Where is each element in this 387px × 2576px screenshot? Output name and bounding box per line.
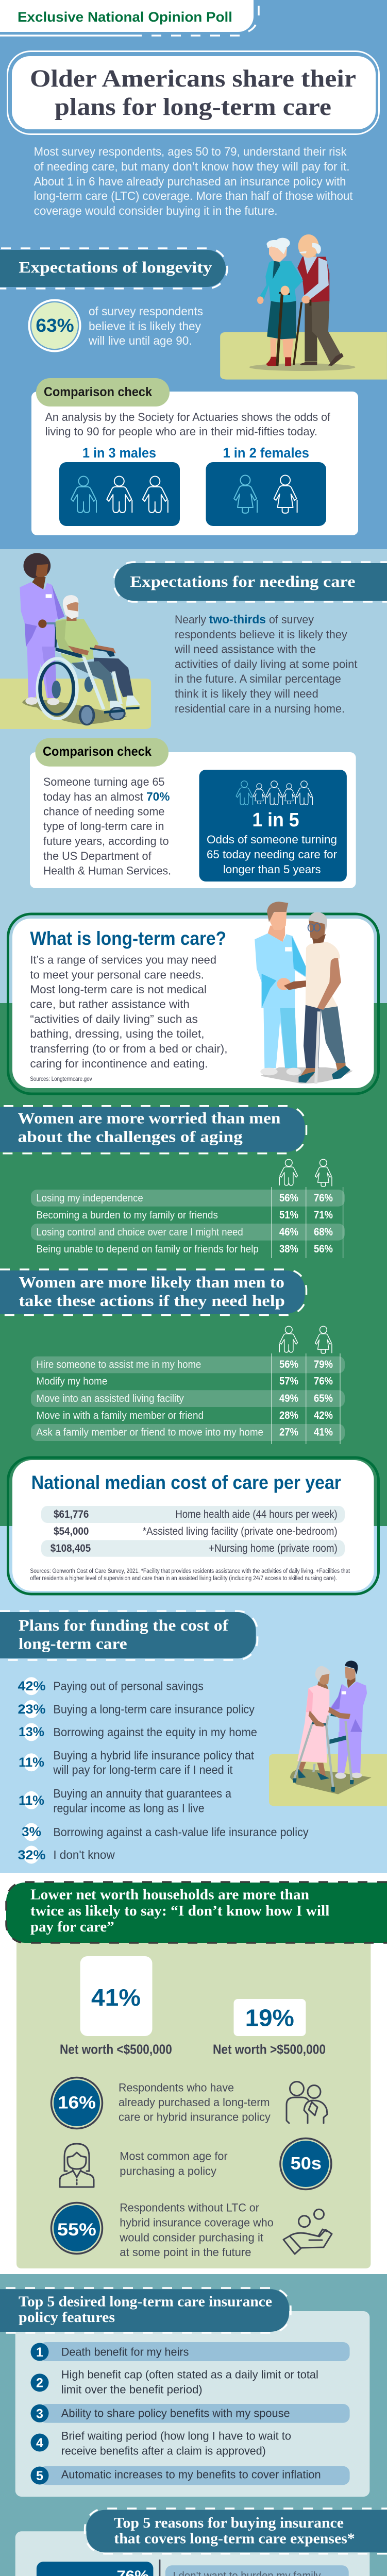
panel: comparison check longevity: living to 90 for people who are in their mid-fifties today. (45, 425, 317, 438)
text block: needing care: residential care in a nursing home. (175, 702, 345, 715)
panel: national median cost of care: $108,405 (51, 1543, 91, 1554)
table: worries by gender: Losing my independence (36, 1193, 143, 1204)
intro text: of needing care, but many don’t know how they will pay for it. (34, 160, 350, 173)
panel: comparison check needing care: Someone turning age 65 (43, 775, 164, 788)
panel: what is long-term care: care, but rather assistance with (30, 998, 190, 1011)
panel: net worth section (6, 1882, 387, 2268)
panel: national median cost of care: +Nursing home (private room) (209, 1543, 338, 1554)
table: actions by gender: 42% (314, 1410, 333, 1421)
panel: comparison check needing care: longer than 5 years (223, 863, 321, 876)
list: funding plans: Buying an annuity that guarantees a (53, 1787, 231, 1800)
panel: comparison check longevity: An analysis by the Society for Actuaries shows the odds of (45, 411, 331, 423)
panel: national median cost of care: $61,776 (54, 1509, 89, 1520)
panel: what is long-term care: bathing, dressing, using the toilet, (30, 1027, 205, 1040)
heading pill: lower net worth: Lower net worth households are more than (30, 1887, 309, 1903)
stat: 63 percent: of survey respondents (89, 304, 203, 318)
stat: 55 percent: would consider purchasing it (119, 2231, 264, 2244)
illustration: nurse helping woman with walker (269, 1660, 387, 1806)
list: funding plans (18, 1677, 309, 1864)
text block: needing care: Nearly (175, 613, 207, 626)
stat: 16 percent: already purchased a long-term (119, 2096, 270, 2109)
panel: top 5 desired features: Automatic increases to my benefits to cover inflation (61, 2468, 321, 2481)
panel: what is long-term care: What is long-term care? (30, 928, 226, 949)
panel: top 5 desired features: 3 (36, 2406, 43, 2421)
table: actions by gender: 76% (314, 1376, 333, 1387)
panel: what is long-term care (8, 902, 378, 1094)
top tab: exclusive poll (0, 0, 259, 36)
text block: needing care: activities of daily living at some point (175, 658, 358, 671)
panel: comparison check needing care: future years, according to (43, 835, 169, 848)
stat: 50s (280, 2138, 331, 2190)
heading pill: women more likely: Women are more likely than men to (19, 1273, 284, 1291)
panel: net worth section: purchasing a policy (120, 2165, 217, 2178)
stat: 63 percent: 63% (36, 315, 74, 336)
panel: what is long-term care: “activities of daily living” such as (30, 1013, 198, 1026)
panel: top 5 desired features: High benefit cap (often stated as a daily limit or total (61, 2368, 318, 2381)
list: funding plans: 11% (19, 1793, 44, 1808)
panel: top 5 desired features: Brief waiting period (how long I have to wait to (61, 2430, 291, 2443)
table: worries by gender: Losing control and choice over care I might need (36, 1227, 243, 1238)
table: actions by gender: 49% (279, 1393, 298, 1404)
section background: pale blue (0, 549, 387, 1003)
heading pill: top 5 desired features: Top 5 desired long-term care insurance (19, 2294, 272, 2310)
section background: blue (0, 0, 387, 549)
panel: national median cost of care: *Assisted living facility (private one-bedroom) (143, 1526, 338, 1537)
intro text (34, 145, 353, 217)
table: worries by gender: 56% (314, 1243, 333, 1255)
text block: needing care: will need assistance with the (174, 643, 316, 656)
icon: woman (60, 2144, 94, 2187)
list: funding plans: will pay for long-term care if I need it (53, 1763, 233, 1776)
panel: comparison check longevity (31, 378, 358, 535)
panel: top 5 reasons for buying (15, 2509, 387, 2576)
list: funding plans: 3% (22, 1825, 41, 1839)
panel: what is long-term care: Most long-term care is not medical (30, 983, 207, 996)
heading pill: women more worried (0, 1106, 306, 1154)
list: funding plans: 23% (18, 1702, 45, 1717)
intro text: coverage would consider buying it in the future. (34, 204, 278, 217)
panel: national median cost of care: Sources: Genworth Cost of Care Survey, 2021. *Facility that provides residents assistance with the activities of daily living. +Facilities that (30, 1568, 350, 1574)
panel: national median cost of care: $54,000 (54, 1526, 89, 1537)
table: actions by gender: 79% (314, 1359, 333, 1370)
panel: comparison check needing care: 70% (146, 790, 170, 803)
heading pill: plans for funding: long-term care (19, 1635, 127, 1653)
stat: 16 percent: Respondents who have (119, 2081, 234, 2094)
text block: needing care: in the future. A similar percentage (175, 672, 341, 685)
heading pill: women more worried: Women are more worried than men (18, 1109, 280, 1127)
list: funding plans: Buying a hybrid life insurance policy that (53, 1749, 255, 1762)
title box (7, 52, 379, 134)
heading pill: women more likely (0, 1269, 306, 1315)
heading pill: women more likely: take these actions if they need help (19, 1292, 285, 1310)
heading pill: women more worried: about the challenges of aging (18, 1128, 243, 1146)
list: funding plans: Borrowing against the equity in my home (53, 1725, 257, 1739)
title box: plans for long-term care (55, 93, 331, 121)
panel: comparison check longevity: 1 in 3 males (82, 445, 156, 461)
heading pill: plans for funding (0, 1611, 258, 1660)
illustration: elderly couple with canes (220, 234, 387, 380)
table: actions by gender: Move in with a family member or friend (36, 1410, 204, 1421)
heading pill: plans for funding: Plans for funding the cost of (19, 1616, 229, 1634)
stat: 16 percent: care or hybrid insurance policy (119, 2111, 271, 2124)
icon: hand with coins (283, 2209, 332, 2254)
panel: what is long-term care: caring for incontinence and eating. (30, 1057, 208, 1070)
text block: needing care: think it is likely they will need (175, 687, 318, 700)
text block: needing care: respondents believe it is likely they (175, 628, 348, 641)
panel: net worth section: 41% (91, 1984, 141, 2011)
table: actions by gender: Ask a family member or friend to move into my home (36, 1427, 263, 1438)
panel: top 5 desired features (0, 2288, 369, 2497)
panel: national median cost of care (8, 1458, 378, 1594)
panel: top 5 desired features: receive benefits after a claim is approved) (61, 2444, 266, 2457)
table: actions by gender: 56% (279, 1359, 298, 1370)
list: funding plans: 13% (19, 1725, 44, 1739)
icon: couple (287, 2081, 327, 2123)
stat: 63 percent: believe it is likely they (89, 319, 201, 333)
table: actions by gender (31, 1326, 345, 1444)
table: worries by gender: 51% (279, 1209, 298, 1221)
top tab: exclusive poll: Exclusive National Opinion Poll (18, 9, 232, 25)
heading pill: reasons for buying: Top 5 reasons for buying insurance (114, 2515, 344, 2531)
intro text: Most survey respondents, ages 50 to 79, understand their risk (34, 145, 347, 158)
list: funding plans: Buying a long-term care insurance policy (53, 1703, 255, 1716)
illustration: nurse pushing wheelchair (0, 553, 151, 729)
text block: needing care: of survey (269, 613, 314, 626)
panel: comparison check needing care: the US Department of (43, 850, 152, 862)
table: actions by gender: 27% (279, 1427, 298, 1438)
list: funding plans: 11% (19, 1755, 44, 1770)
table: worries by gender: 56% (279, 1192, 298, 1204)
panel: top 5 desired features: 2 (36, 2376, 43, 2391)
stat: 50s: 50s (291, 2154, 322, 2174)
list: funding plans: Borrowing against a cash-value life insurance policy (53, 1825, 309, 1839)
section background: white (0, 1873, 387, 2274)
panel: top 5 desired features: 4 (36, 2436, 43, 2450)
panel: net worth section: 19% (245, 2005, 294, 2031)
table: worries by gender: 71% (314, 1209, 333, 1221)
heading pill: top 5 desired features (0, 2288, 291, 2333)
list: funding plans: 32% (18, 1848, 45, 1862)
stat: 55 percent: at some point in the future (120, 2246, 251, 2259)
stat: 55 percent (52, 2201, 274, 2259)
panel: what is long-term care: to meet your personal care needs. (30, 969, 204, 981)
title box: Older Americans share their (30, 65, 356, 92)
heading pill: reasons for buying (85, 2509, 387, 2554)
stat: 55 percent: 55% (57, 2220, 96, 2240)
heading pill: expectations of longevity (0, 248, 227, 289)
intro text: About 1 in 6 have already purchased an insurance policy with (34, 175, 346, 188)
stat: 16 percent: 16% (58, 2093, 96, 2113)
list: funding plans: Paying out of personal savings (53, 1680, 204, 1693)
panel: national median cost of care: Home health aide (44 hours per week) (175, 1509, 338, 1520)
heading pill: expectations for needing care (113, 562, 387, 602)
table: actions by gender: 57% (279, 1376, 298, 1387)
table: actions by gender: 41% (314, 1427, 333, 1438)
panel: comparison check needing care: 1 in 5 (253, 809, 299, 831)
heading pill: expectations of longevity: Expectations of longevity (19, 258, 212, 276)
section background: teal (0, 2274, 387, 2576)
stat: 63 percent: will live until age 90. (88, 334, 192, 347)
table: actions by gender: Hire someone to assist me in my home (36, 1359, 201, 1370)
heading pill: lower net worth: twice as likely to say: “I don’t know how I will (30, 1903, 330, 1919)
panel: comparison check longevity: 1 in 2 females (223, 445, 309, 461)
table: worries by gender (31, 1159, 345, 1258)
panel: what is long-term care: transferring (to or from a bed or chair), (30, 1042, 228, 1055)
panel: comparison check longevity: Comparison check (44, 385, 152, 399)
intro text: long-term care (LTC) coverage. More than half of those without (34, 189, 353, 202)
illustration: nurse helping man with cane (255, 902, 353, 1083)
panel: what is long-term care: Sources: Longtermcare.gov (30, 1076, 92, 1082)
table: worries by gender: 76% (314, 1192, 333, 1204)
panel: comparison check needing care: type of long-term care in (43, 820, 164, 833)
heading pill: reasons for buying: that covers long-term care expenses* (114, 2531, 355, 2547)
panel: comparison check needing care: Comparison check (43, 744, 152, 759)
table: actions by gender: 28% (279, 1410, 298, 1421)
panel: top 5 desired features: 1 (36, 2345, 43, 2360)
panel: national median cost of care: offer residents a higher level of supervision and care than in an assisted living facility (including 24/7 access to skilled nursing care). (30, 1575, 337, 1582)
table: worries by gender: Becoming a burden to my family or friends (36, 1210, 218, 1221)
table: actions by gender: Move into an assisted living facility (36, 1393, 184, 1404)
panel: net worth section: Net worth <$500,000 (60, 2042, 172, 2057)
stat: 55 percent: hybrid insurance coverage who (120, 2216, 274, 2229)
list: funding plans: I don't know (53, 1848, 115, 1861)
panel: comparison check needing care (30, 738, 356, 888)
stat: 63 percent (29, 300, 203, 351)
table: worries by gender: Being unable to depend on family or friends for help (36, 1244, 259, 1255)
text block: needing care (174, 613, 358, 715)
table: worries by gender: 38% (279, 1243, 298, 1255)
panel: national median cost of care: National median cost of care per year (31, 1472, 341, 1493)
panel: comparison check needing care: Odds of someone turning (207, 833, 337, 846)
text block: needing care: two-thirds (209, 613, 266, 626)
table: actions by gender: Modify my home (36, 1376, 107, 1387)
panel: top 5 desired features: Ability to share policy benefits with my spouse (61, 2407, 290, 2420)
heading pill: expectations for needing care: Expectations for needing care (130, 572, 356, 590)
heading pill: top 5 desired features: policy features (19, 2310, 115, 2326)
panel: what is long-term care: It’s a range of services you may need (30, 954, 216, 967)
panel: net worth section: Net worth >$500,000 (213, 2042, 326, 2057)
stat: 55 percent: Respondents without LTC or (120, 2201, 259, 2214)
panel: comparison check needing care: Health & Human Services. (43, 865, 171, 877)
panel: top 5 desired features: limit over the benefit period) (61, 2383, 203, 2396)
panel: net worth section: Most common age for (120, 2150, 228, 2163)
panel: comparison check needing care: 65 today needing care for (207, 848, 337, 861)
heading pill: lower net worth (6, 1882, 387, 1943)
table: worries by gender: 46% (279, 1226, 298, 1238)
stat: 16 percent (52, 2077, 271, 2129)
panel: comparison check needing care: chance of needing some (43, 805, 164, 818)
heading pill: lower net worth: pay for care” (30, 1919, 114, 1935)
list: funding plans: 42% (18, 1679, 45, 1693)
panel: top 5 desired features: Death benefit for my heirs (61, 2345, 189, 2358)
table: worries by gender: 68% (314, 1226, 333, 1238)
panel: top 5 desired features: 5 (36, 2469, 43, 2483)
table: actions by gender: 65% (314, 1393, 333, 1404)
panel: comparison check needing care: today has an almost (43, 790, 144, 803)
list: funding plans: regular income as long as I live (53, 1802, 205, 1815)
section background: light blue (0, 1526, 387, 1873)
section background: green (0, 1003, 387, 1526)
